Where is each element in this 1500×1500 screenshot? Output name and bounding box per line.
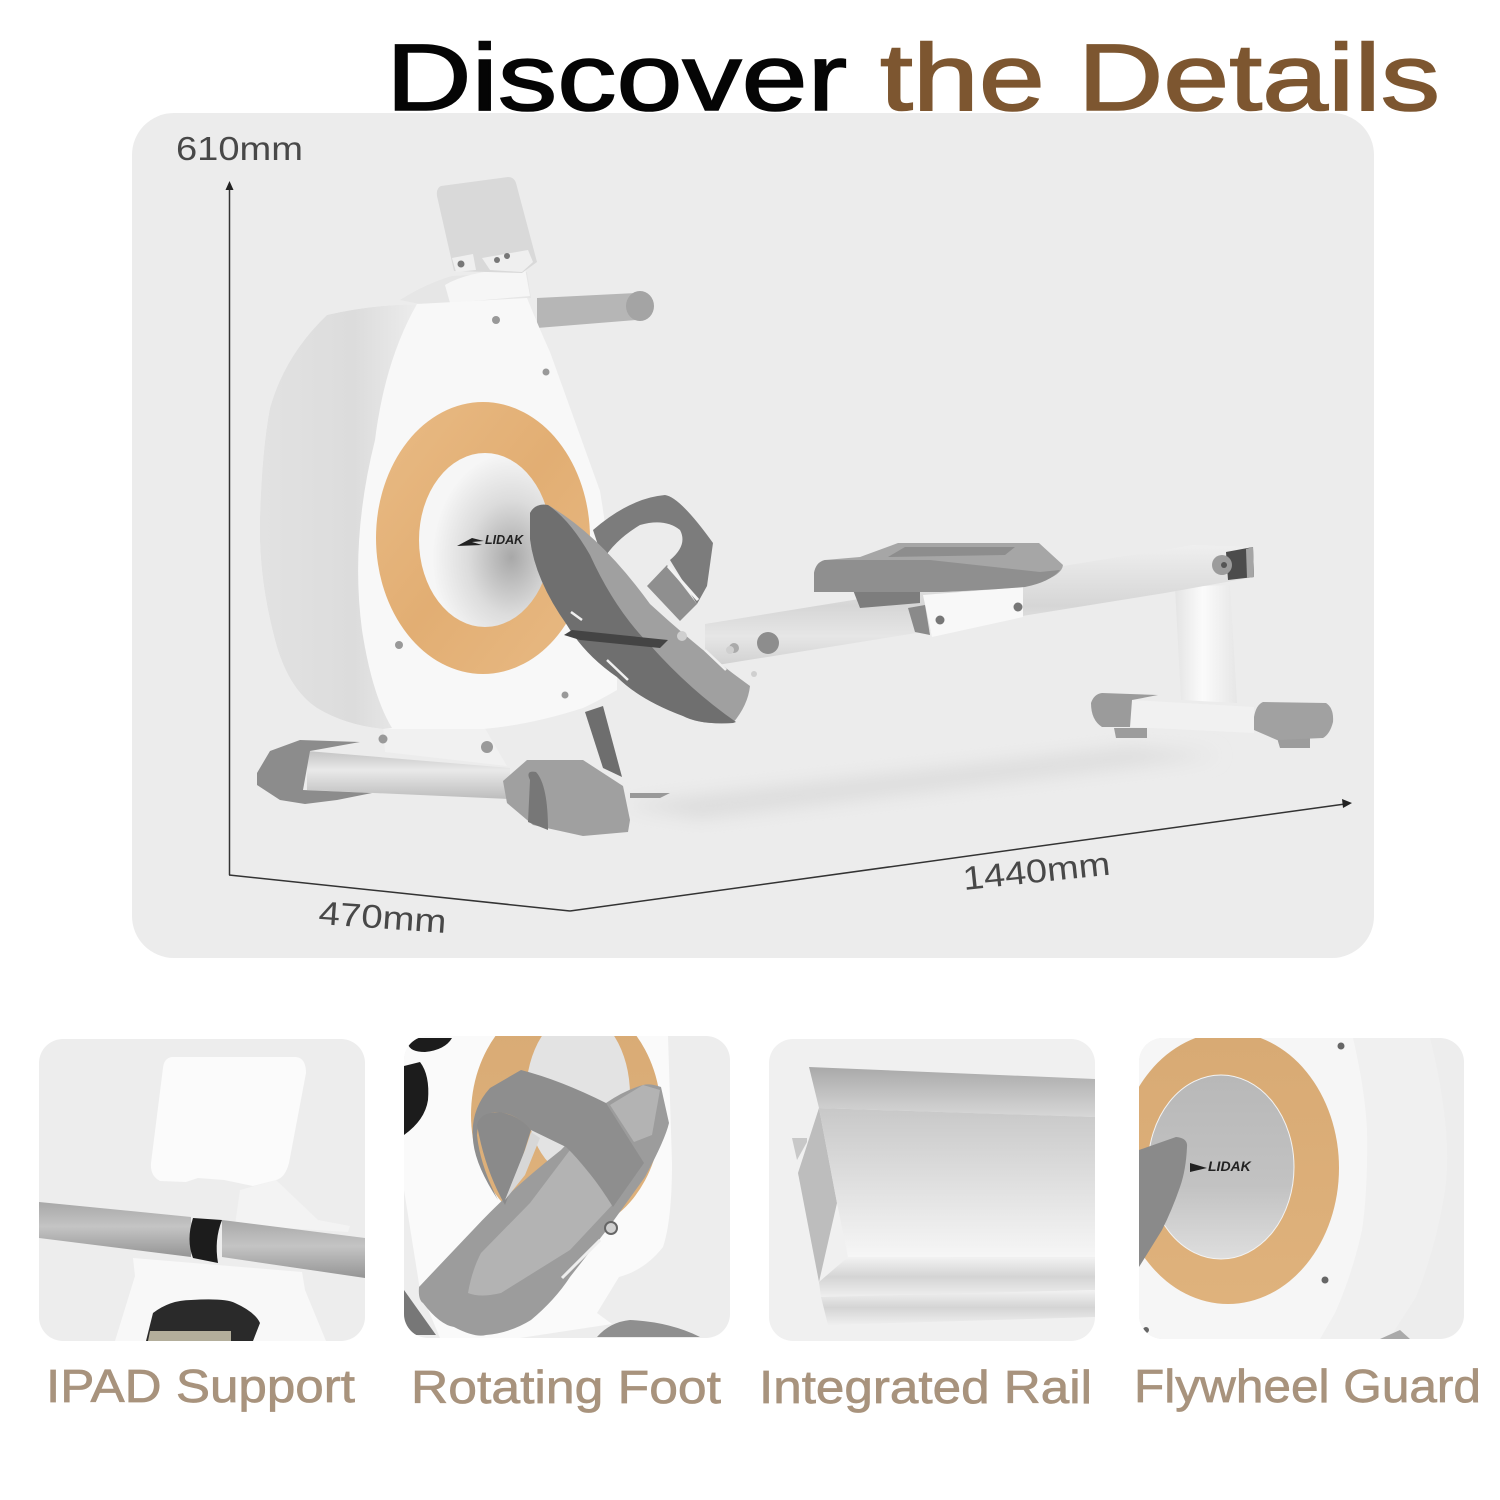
icon: handle bar — [39, 1202, 191, 1257]
caption: Flywheel Guard: Flywheel Guard — [1134, 1360, 1481, 1412]
icon: guard disc — [1148, 1075, 1294, 1259]
panel: rotating foot photo — [404, 1036, 730, 1338]
front base — [257, 706, 670, 836]
icon: base console — [115, 1258, 326, 1341]
seat — [814, 543, 1063, 637]
panel: main dimensions — [132, 113, 1374, 958]
icon: tablet bracket — [235, 1180, 350, 1232]
caption: IPAD Support: IPAD Support — [46, 1360, 355, 1412]
icon: wood ring — [1139, 1038, 1339, 1304]
body housing — [260, 298, 617, 729]
wood ring — [376, 402, 590, 674]
icon: foot strap — [473, 1070, 644, 1207]
icon: logo: LIDAK — [1208, 1158, 1252, 1174]
rail — [705, 545, 1254, 667]
logo: LIDAK — [485, 533, 524, 547]
dimension: length 1440mm — [570, 799, 1352, 911]
rear rail support — [1091, 585, 1333, 748]
icon: foot plate — [419, 1084, 669, 1336]
panel: flywheel guard photo — [1117, 1032, 1464, 1339]
title: Discover the Details — [386, 25, 1440, 131]
dimension: length 1440mm: 1440mm — [961, 845, 1112, 897]
icon: display — [146, 1299, 260, 1341]
dimension: height 610mm: 610mm — [176, 130, 303, 167]
dimension: height 610mm — [176, 130, 303, 875]
caption: Rotating Foot: Rotating Foot — [411, 1361, 721, 1413]
dimension: depth 470mm: 470mm — [318, 894, 448, 940]
icon: pivot bolt — [605, 1222, 617, 1234]
icon: wood ring — [471, 1036, 658, 1213]
icon: tablet — [151, 1057, 306, 1186]
caption: Integrated Rail: Integrated Rail — [759, 1361, 1092, 1413]
dimension: depth 470mm — [229, 875, 570, 940]
handle — [537, 291, 654, 328]
panel: iPad support photo — [39, 1039, 365, 1341]
icon: white body — [404, 1036, 672, 1338]
panel: integrated rail photo — [769, 1039, 1095, 1341]
icon: pedal edge — [1139, 1137, 1187, 1267]
foot pedal — [530, 495, 757, 723]
tablet holder — [400, 177, 537, 304]
flywheel disc — [419, 453, 551, 627]
rowing machine — [257, 177, 1333, 836]
icon: dark dials — [404, 1038, 452, 1135]
